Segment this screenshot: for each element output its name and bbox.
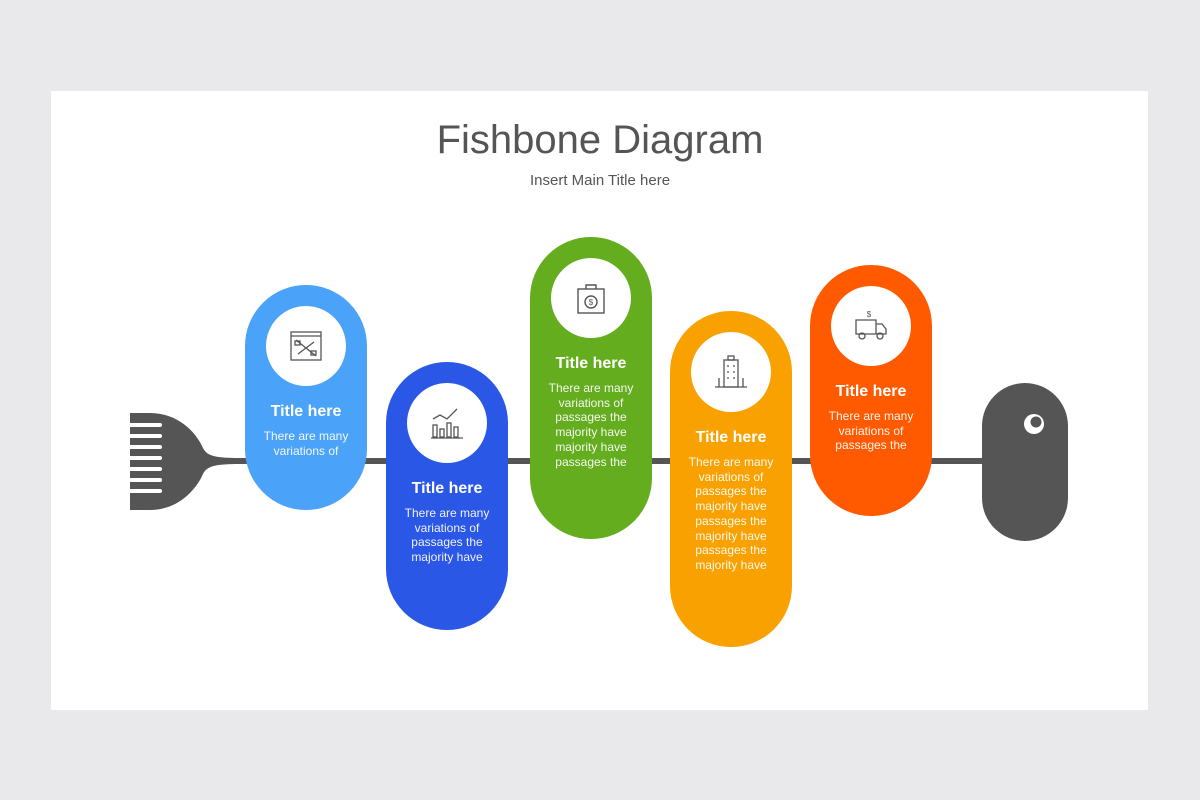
head with eye	[982, 383, 1068, 541]
pill 4: orange: There are many variations of passages the majority have passages the majority have passages the majority have	[689, 455, 773, 572]
icon: building	[691, 332, 771, 412]
pill 1: blue: Title here	[271, 403, 341, 420]
pill 1: blue	[245, 285, 367, 510]
icon: money bag: $	[589, 298, 594, 307]
pill 3: green: There are many variations of passages the majority have majority have passages the	[549, 381, 633, 469]
pill 2: dark blue: There are many variations of passages the majority have	[405, 506, 489, 564]
subtitle: Insert Main Title here	[530, 172, 670, 189]
pill 3: green	[530, 237, 652, 539]
pill 2: dark blue	[386, 362, 508, 630]
pill 4: orange	[670, 311, 792, 647]
title: Fishbone Diagram	[437, 118, 763, 162]
pill 5: red-orange: There are many variations of passages the	[829, 409, 913, 452]
pill 2: dark blue: Title here	[412, 480, 482, 497]
card background	[51, 91, 1148, 710]
tail	[128, 413, 240, 510]
icon: chart	[407, 383, 487, 463]
pill 1: blue: There are many variations of	[264, 429, 348, 458]
icon: truck	[831, 286, 911, 366]
spine	[190, 458, 990, 464]
icon: map	[266, 306, 346, 386]
pill 5: red-orange: Title here	[836, 383, 906, 400]
icon: truck: $	[867, 310, 872, 319]
icon: money bag	[551, 258, 631, 338]
pill 4: orange: Title here	[696, 429, 766, 446]
pill 5: red-orange	[810, 265, 932, 516]
pill 3: green: Title here	[556, 355, 626, 372]
